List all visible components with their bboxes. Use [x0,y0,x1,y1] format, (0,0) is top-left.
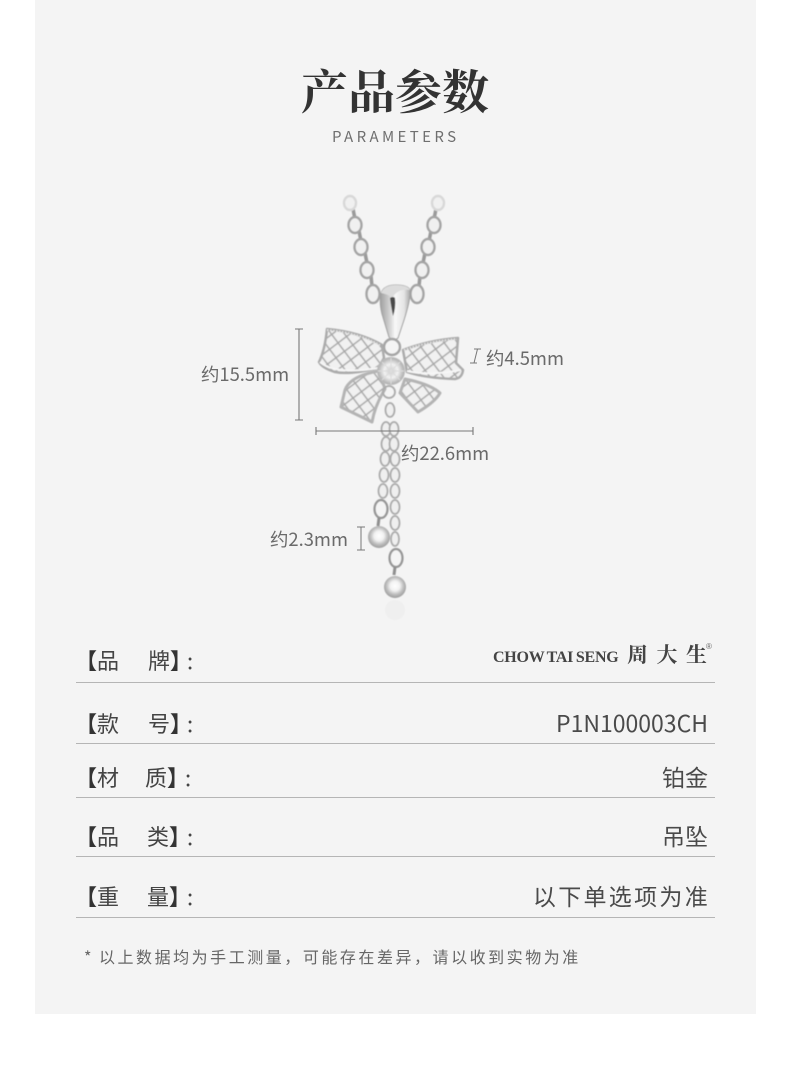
row: brand: 牌】 [148,644,192,676]
row: category: 类】 [147,820,191,852]
dimension label: height: 约15.5mm [201,361,289,387]
brand logo [493,639,716,669]
row: brand [75,639,716,676]
right wing [403,338,463,379]
row: material: 铂金 [662,759,708,793]
row: material: 【材 [75,761,119,793]
row: model [75,705,708,739]
bail [380,285,410,355]
dimension: width [316,427,473,435]
row: category: 吊坠 [662,818,708,852]
row: model: 【款 [75,707,119,739]
row: brand: : [187,644,193,676]
row: weight: 量】 [147,880,191,912]
row: category: : [187,820,193,852]
title: 产品参数 [301,56,489,123]
lower right tail [400,379,440,412]
row: model: 号】 [148,707,192,739]
row: model: P1N100003CH [556,705,708,739]
centre disc [378,358,404,384]
dimension: height [295,329,303,420]
lower left tail [341,371,385,422]
footnote: 以上数据均为手工测量，可能存在差异，请以收到实物为准 [99,944,581,968]
pendant illustration with dimension marks [295,194,481,598]
row: material [75,759,708,793]
dimension: ribbon width [470,349,481,363]
brand logo: 周大生 [627,639,716,669]
beads [368,526,406,620]
dimension label: width: 约22.6mm [401,440,489,466]
row: material: 质】 [145,761,189,793]
row: weight: 【重 [75,880,119,912]
row: model: : [187,707,193,739]
tassel chains [374,386,402,575]
row: category: 【品 [75,820,119,852]
left wing [319,329,384,373]
brand logo: ® [706,642,712,651]
row: brand: 【品 [75,644,119,676]
row: material: : [185,761,191,793]
brand logo: CHOW TAI SENG [493,649,618,666]
dimension label: ribbon: 约4.5mm [486,345,564,371]
footnote: * [84,944,91,968]
row: weight: : [187,880,193,912]
dimension: bead [357,527,365,550]
subtitle: PARAMETERS [332,126,459,147]
row: weight: 以下单选项为准 [533,878,710,912]
neck chain [344,196,444,303]
bow [319,329,463,422]
dimension label: bead: 约2.3mm [270,526,348,552]
row: category [75,818,708,852]
row: weight [75,878,710,912]
